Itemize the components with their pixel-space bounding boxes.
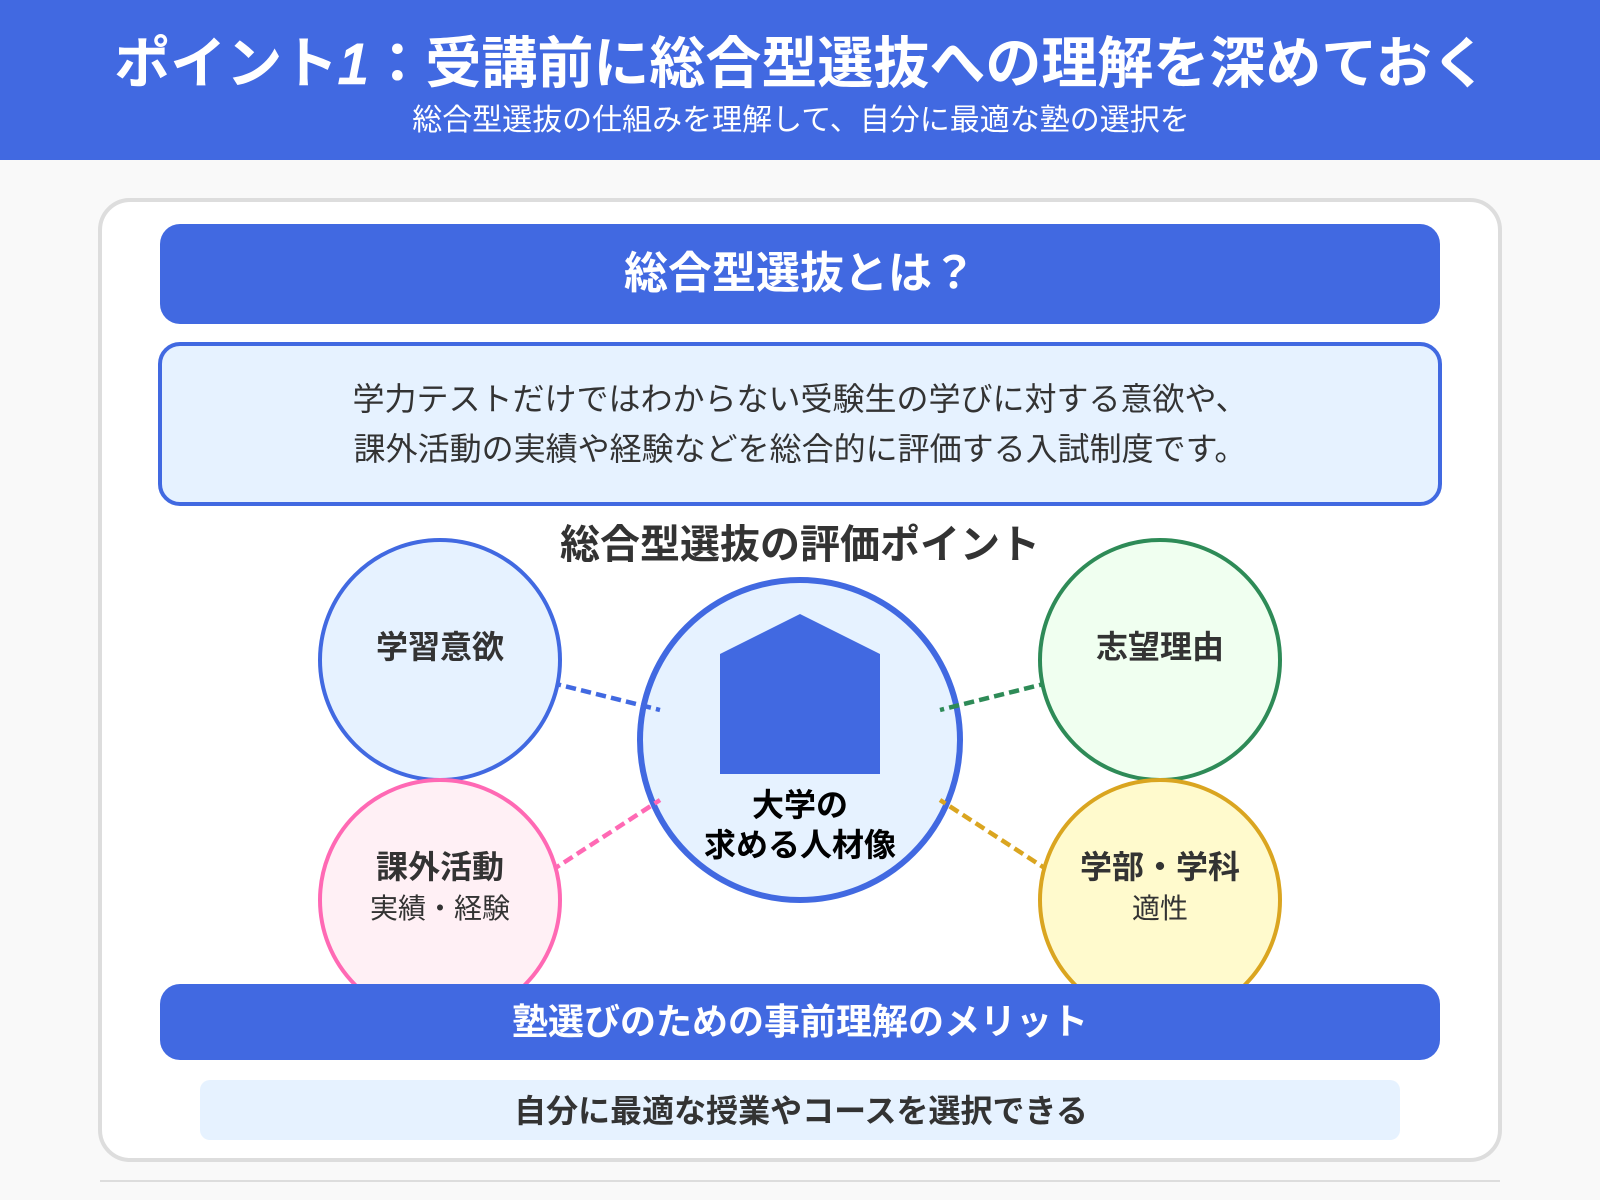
description box xyxy=(160,344,1440,504)
section heading bar: 総合型選抜とは？ xyxy=(624,249,976,298)
description box: 学力テストだけではわからない受験生の学びに対する意欲や、 xyxy=(352,381,1248,417)
connector: green dashed line xyxy=(940,684,1043,710)
circle: faculty and department: 適性 xyxy=(1132,893,1188,924)
circle: faculty and department xyxy=(1040,780,1280,1020)
circle: extracurricular activities: 課外活動 xyxy=(376,849,504,885)
icon: building xyxy=(720,614,880,774)
merit item box xyxy=(200,1080,1400,1140)
circle: faculty and department: 学部・学科 xyxy=(1080,849,1240,885)
circle: learning motivation xyxy=(320,540,560,780)
panel: main card xyxy=(100,200,1500,1160)
subtitle: 総合型選抜の仕組みを理解して、自分に最適な塾の選択を xyxy=(412,104,1190,137)
merit heading bar xyxy=(160,984,1440,1060)
center circle: university's ideal student: 大学の xyxy=(752,787,848,823)
merit heading bar: 塾選びのための事前理解のメリット xyxy=(512,1001,1088,1042)
description box: 課外活動の実績や経験などを総合的に評価する入試制度です。 xyxy=(354,431,1246,467)
footer divider xyxy=(100,1180,1500,1182)
connector: pink dashed line xyxy=(556,800,660,868)
connector: gold dashed line xyxy=(940,800,1044,868)
circle: reason for application: 志望理由 xyxy=(1096,629,1224,665)
circle: reason for application xyxy=(1040,540,1280,780)
section heading bar xyxy=(160,224,1440,324)
center circle: university's ideal student: 求める人材像 xyxy=(704,827,896,863)
circle: extracurricular activities: 実績・経験 xyxy=(370,893,510,924)
circle: extracurricular activities xyxy=(320,780,560,1020)
merit item box: 自分に最適な授業やコースを選択できる xyxy=(514,1093,1088,1129)
title: ポイント1：受講前に総合型選抜への理解を深めておく xyxy=(114,32,1488,95)
header banner xyxy=(0,0,1600,160)
evaluation points heading: 総合型選抜の評価ポイント xyxy=(560,523,1040,567)
connector: blue dashed line xyxy=(557,684,660,710)
center circle: university's ideal student xyxy=(640,580,960,900)
circle: learning motivation: 学習意欲 xyxy=(376,629,504,665)
